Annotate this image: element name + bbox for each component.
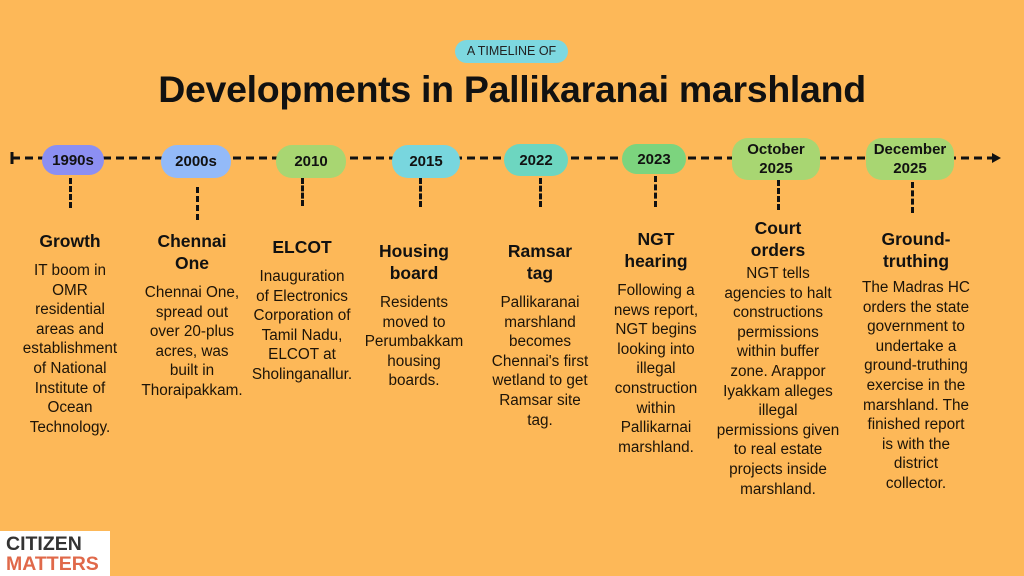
- badge: a timeline of: [455, 40, 568, 63]
- column: Ramsar tag: Pallikaranai: [500, 294, 580, 311]
- column: Court orders: within buffer: [737, 343, 819, 360]
- timeline arrow: [10, 152, 1001, 164]
- pill: 2015: 2015: [409, 153, 443, 170]
- logo: Citizen Matters: CITIZEN: [6, 533, 82, 555]
- column: Ground-truthing: [862, 229, 970, 492]
- column: Ramsar tag: becomes: [509, 333, 571, 350]
- column: Growth: Growth: [39, 231, 101, 251]
- column: Growth: residential: [35, 301, 105, 318]
- column: Housing board: moved to: [383, 314, 445, 331]
- column: NGT hearing: hearing: [624, 251, 688, 271]
- column: Court orders: orders: [751, 240, 805, 260]
- column: Ground-truthing: ground-truthing: [864, 357, 968, 374]
- column: Ground-truthing: truthing: [883, 251, 949, 271]
- pill: 2023: 2023: [637, 150, 671, 168]
- column: Housing board: Perumbakkam: [365, 333, 463, 350]
- pill: 2023: [622, 144, 686, 174]
- column: Ramsar tag: Ramsar site: [499, 392, 581, 409]
- column: Housing board: boards.: [388, 372, 440, 389]
- column: Court orders: Court: [755, 218, 801, 238]
- column: Growth: Technology.: [30, 419, 110, 436]
- column: Chennai One: [141, 231, 243, 399]
- column: ELCOT: Sholinganallur.: [252, 366, 352, 383]
- column: Ramsar tag: Ramsar: [508, 241, 572, 261]
- column: NGT hearing: NGT begins: [615, 321, 697, 338]
- column: Ground-truthing: Ground-: [881, 229, 950, 249]
- column: Chennai One: spread out: [156, 304, 228, 321]
- column: Ground-truthing: undertake a: [876, 338, 956, 355]
- column: Housing board: Housing: [379, 241, 449, 261]
- column: Ramsar tag: [492, 241, 588, 429]
- column: ELCOT: Corporation of: [254, 307, 350, 324]
- column: Housing board: housing: [387, 353, 441, 370]
- column: Ground-truthing: orders the state: [863, 299, 969, 316]
- column: Court orders: Iyakkam alleges: [723, 383, 833, 400]
- pill: 1990s: 1990s: [52, 152, 94, 168]
- column: ELCOT: [252, 237, 352, 383]
- column: Court orders: agencies to halt: [724, 285, 832, 302]
- column: Housing board: board: [390, 263, 438, 283]
- column: Growth: Institute of: [35, 380, 105, 397]
- column: Ramsar tag: tag: [527, 263, 553, 283]
- column: Ramsar tag: marshland: [504, 314, 576, 331]
- pill: December 2025: December: [874, 141, 946, 158]
- column: Court orders: permissions given: [717, 422, 839, 439]
- column: Court orders: marshland.: [740, 481, 816, 498]
- pill: October 2025: [732, 138, 820, 180]
- column: Growth: of National: [33, 360, 107, 377]
- column: Chennai One: built in: [170, 362, 214, 379]
- pill: October 2025: October: [747, 141, 805, 158]
- column: Court orders: to real estate: [734, 441, 822, 458]
- pill: 2022: [504, 144, 568, 176]
- column: NGT hearing: news report,: [614, 302, 698, 319]
- column: Ground-truthing: collector.: [886, 475, 946, 492]
- column: Court orders: permissions: [737, 324, 819, 341]
- pill: December 2025: 2025: [893, 160, 927, 177]
- column: Housing board: [365, 241, 463, 389]
- pill: 2015: [392, 145, 460, 178]
- column: Ground-truthing: district: [894, 455, 938, 472]
- column: NGT hearing: marshland.: [618, 439, 694, 456]
- column: Ground-truthing: The Madras HC: [862, 279, 970, 296]
- column: NGT hearing: within: [636, 400, 676, 417]
- column: Chennai One: Chennai One,: [145, 284, 239, 301]
- column: Ground-truthing: is with the: [882, 436, 950, 453]
- column: Growth: OMR: [52, 282, 88, 299]
- column: Chennai One: Chennai: [157, 231, 227, 251]
- column: Chennai One: Thoraipakkam.: [141, 382, 243, 399]
- pill: 2000s: 2000s: [175, 153, 217, 170]
- column: Ramsar tag: tag.: [527, 412, 553, 429]
- column: Ground-truthing: finished report: [868, 416, 964, 433]
- column: ELCOT: Tamil Nadu,: [262, 327, 342, 344]
- column: Court orders: NGT tells: [746, 265, 810, 282]
- column: Growth: areas and: [36, 321, 104, 338]
- column: ELCOT: ELCOT at: [268, 346, 336, 363]
- stems: [69, 178, 72, 208]
- column: ELCOT: ELCOT: [272, 237, 332, 257]
- pill: 2010: 2010: [294, 153, 328, 170]
- column: Ground-truthing: exercise in the: [867, 377, 965, 394]
- column: NGT hearing: construction: [615, 380, 697, 397]
- column: NGT hearing: illegal: [636, 360, 676, 377]
- column: Growth: [23, 231, 117, 436]
- column: NGT hearing: Following a: [617, 282, 695, 299]
- column: Ground-truthing: government to: [867, 318, 965, 335]
- column: Ramsar tag: wetland to get: [492, 372, 588, 389]
- column: Court orders: projects inside: [729, 461, 827, 478]
- column: Growth: Ocean: [47, 399, 93, 416]
- column: Growth: establishment: [23, 340, 117, 357]
- pill: October 2025: 2025: [759, 160, 793, 177]
- column: Chennai One: One: [175, 253, 209, 273]
- column: ELCOT: Inauguration: [259, 268, 345, 285]
- column: Ground-truthing: marshland. The: [863, 397, 969, 414]
- title: Developments in Pallikaranai marshland: [158, 68, 866, 110]
- pill: 1990s: [42, 145, 104, 175]
- column: NGT hearing: Pallikarnai: [621, 419, 691, 436]
- logo: Citizen Matters: MATTERS: [6, 553, 99, 575]
- column: ELCOT: of Electronics: [256, 288, 348, 305]
- column: Housing board: Residents: [380, 294, 448, 311]
- pill: December 2025: [866, 138, 954, 180]
- badge: a timeline of: A TIMELINE OF: [467, 44, 556, 58]
- pill: 2022: 2022: [519, 152, 553, 168]
- column: NGT hearing: looking into: [617, 341, 695, 358]
- column: NGT hearing: NGT: [638, 229, 674, 249]
- column: Ramsar tag: Chennai's first: [492, 353, 588, 370]
- column: Court orders: constructions: [733, 304, 823, 321]
- logo: Citizen Matters: [0, 531, 110, 576]
- pill: 2000s: [161, 145, 231, 178]
- column: Court orders: [717, 218, 839, 498]
- pill: 2010: [276, 145, 346, 178]
- column: Chennai One: acres, was: [155, 343, 229, 360]
- column: Chennai One: over 20-plus: [150, 323, 234, 340]
- column: NGT hearing: [614, 229, 698, 456]
- column: Court orders: illegal: [758, 402, 798, 419]
- column: Court orders: zone. Arappor: [730, 363, 826, 380]
- column: Growth: IT boom in: [34, 262, 106, 279]
